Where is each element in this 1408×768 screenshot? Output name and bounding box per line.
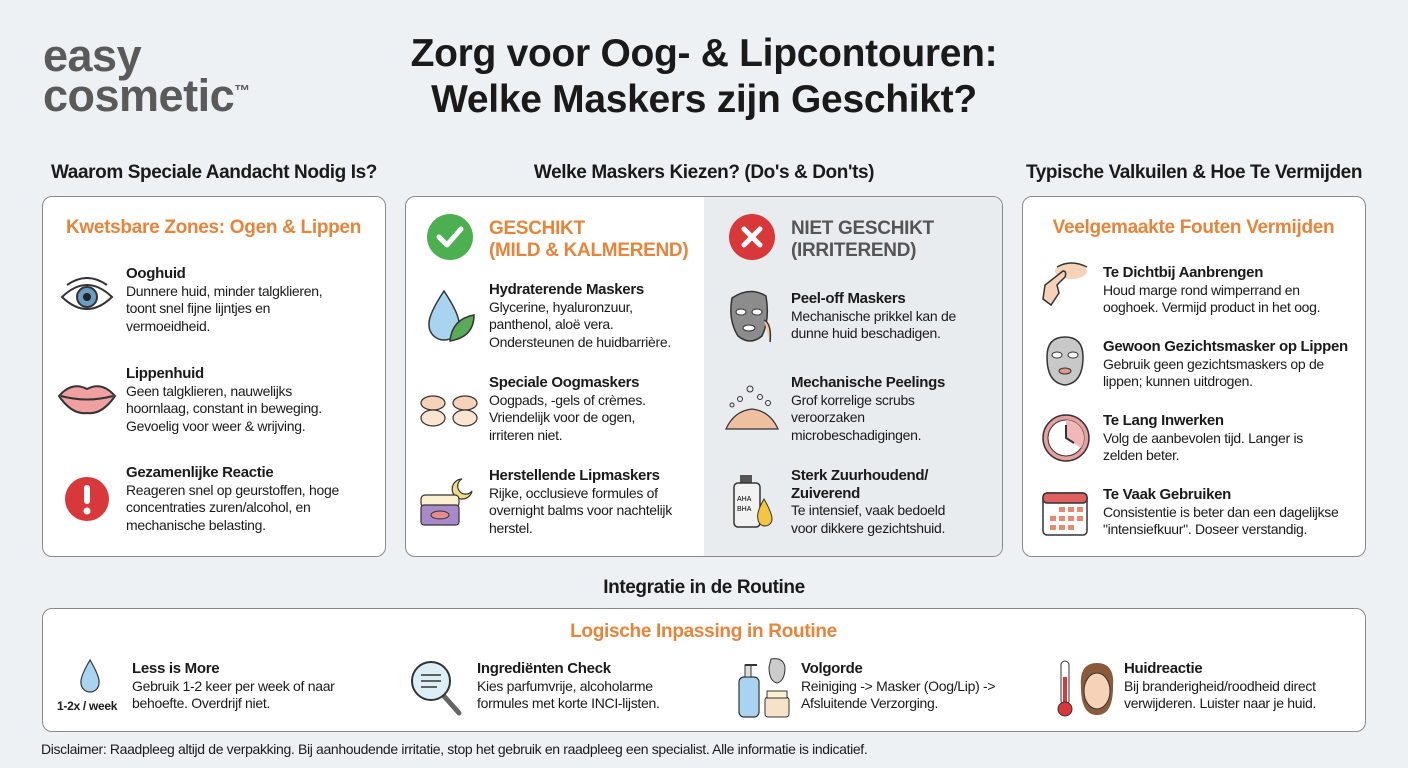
panel: routine bbox=[42, 608, 1366, 732]
heading: niet geschikt: (IRRITEREND) bbox=[791, 240, 916, 261]
icon: acid bottle: BHA bbox=[737, 506, 752, 513]
icon: eye bbox=[60, 277, 114, 310]
panel: do's and don'ts bbox=[405, 196, 1003, 557]
item: ingredienten: Kies parfumvrije, alcoholarme bbox=[477, 678, 653, 694]
item: te dichtbij: Te Dichtbij Aanbrengen bbox=[1103, 264, 1263, 281]
item: gezamenlijke reactie: Gezamenlijke Reactie bbox=[126, 464, 273, 481]
item: te vaak: Te Vaak Gebruiken bbox=[1103, 486, 1231, 503]
item: volgorde bbox=[801, 660, 995, 711]
item: lippenhuid bbox=[126, 365, 322, 434]
item: ooghuid: vermoeidheid. bbox=[126, 318, 210, 334]
icon: scrub bbox=[725, 386, 779, 430]
heading: geschikt bbox=[489, 218, 688, 261]
panel: vulnerable zones bbox=[42, 196, 386, 557]
item: lippenhuid: Geen talgklieren, nauwelijks bbox=[126, 382, 292, 398]
icon: lip jar bbox=[420, 478, 473, 526]
item: te lang bbox=[1103, 412, 1303, 463]
item: ingredienten: formules met korte INCI-lijsten. bbox=[477, 695, 660, 711]
item: gezamenlijke reactie bbox=[126, 464, 339, 533]
item: gezamenlijke reactie: Reageren snel op geurstoffen, hoge bbox=[126, 482, 339, 498]
item: volgorde: Reiniging -> Masker (Oog/Lip) -> bbox=[801, 678, 995, 694]
icon: clock bbox=[1042, 414, 1090, 462]
item: lippenhuid: hoornlaag, constant in beweging. bbox=[126, 400, 322, 416]
item: ooghuid: Dunnere huid, minder talgklieren, bbox=[126, 282, 322, 298]
heading: right: Typische Valkuilen & Hoe Te Vermijden bbox=[1026, 162, 1362, 183]
item: gezichtsmasker op lippen: lippen; kunnen uitdrogen. bbox=[1103, 373, 1253, 389]
title bbox=[411, 32, 997, 121]
item: less is more: Gebruik 1-2 keer per week of naar bbox=[132, 678, 335, 694]
heading: geschikt: GESCHIKT bbox=[489, 218, 585, 239]
item: oogmaskers bbox=[489, 374, 646, 442]
heading: routine: Integratie in de Routine bbox=[603, 577, 805, 598]
item: ooghuid bbox=[126, 265, 322, 334]
item: lipmaskers: Rijke, occlusieve formules of bbox=[489, 484, 658, 500]
item: volgorde: Volgorde bbox=[801, 660, 862, 677]
item: oogmaskers: irriteren niet. bbox=[489, 426, 562, 442]
icon: face mask bbox=[1046, 336, 1084, 386]
right half background bbox=[704, 197, 1004, 558]
icon: drop 1-2x: 1-2x / week bbox=[57, 699, 117, 713]
item: lipmaskers bbox=[489, 467, 672, 536]
title: Zorg voor Oog- & Lipcontouren: bbox=[411, 32, 997, 75]
item: lipmaskers: herstel. bbox=[489, 520, 533, 536]
icon: products bbox=[738, 658, 790, 718]
item: huidreactie: Huidreactie bbox=[1124, 660, 1202, 677]
item: less is more bbox=[132, 660, 335, 711]
heading: middle: Welke Maskers Kiezen? (Do's & Don'ts) bbox=[534, 162, 874, 183]
item: te lang: Te Lang Inwerken bbox=[1103, 412, 1224, 429]
panel heading: Kwetsbare Zones: Ogen & Lippen bbox=[66, 217, 361, 238]
item: zuurhoudend: Te intensief, vaak bedoeld bbox=[791, 502, 945, 518]
heading: niet geschikt bbox=[791, 218, 934, 261]
item: gezamenlijke reactie: concentraties zuren/alcohol, en bbox=[126, 499, 310, 515]
logo: cosmetic™ bbox=[43, 70, 250, 121]
item: te dichtbij bbox=[1103, 264, 1320, 315]
item: peel-off: Peel-off Maskers bbox=[791, 290, 905, 307]
item: te vaak: "intensiefkuur". Doseer verstandig. bbox=[1103, 521, 1307, 537]
icon: peel-off mask bbox=[730, 290, 772, 342]
item: volgorde: Afsluitende Verzorging. bbox=[801, 695, 938, 711]
item: lippenhuid: Lippenhuid bbox=[126, 365, 204, 382]
item: zuurhoudend: Sterk Zuurhoudend/ bbox=[791, 467, 928, 484]
heading: left: Waarom Speciale Aandacht Nodig Is? bbox=[51, 162, 377, 183]
icon: finger at eye bbox=[1042, 262, 1088, 306]
disclaimer: Disclaimer: Raadpleeg altijd de verpakking. Bij aanhoudende irritatie, stop het gebruik en raadpleeg een specialist. Alle informatie is indicatief. bbox=[41, 741, 867, 757]
item: gezichtsmasker op lippen: Gebruik geen gezichtsmaskers op de bbox=[1103, 356, 1324, 372]
item: lippenhuid: Gevoelig voor weer & wrijving. bbox=[126, 418, 305, 434]
item: lipmaskers: overnight balms voor nachtelijk bbox=[489, 502, 672, 518]
item: zuurhoudend: voor dikkere gezichtshuid. bbox=[791, 520, 945, 536]
item: hydraterende: Hydraterende Maskers bbox=[489, 281, 644, 298]
item: te lang: zelden beter. bbox=[1103, 447, 1179, 463]
item: gezamenlijke reactie: mechanische belasting. bbox=[126, 516, 266, 532]
item: zuurhoudend: Zuiverend bbox=[791, 484, 860, 502]
item: oogmaskers: Oogpads, -gels of crèmes. bbox=[489, 392, 646, 408]
title: Welke Maskers zijn Geschikt? bbox=[431, 78, 977, 121]
icon: magnifier bbox=[411, 661, 462, 716]
item: gezichtsmasker op lippen bbox=[1103, 338, 1348, 389]
item: hydraterende: Glycerine, hyaluronzuur, bbox=[489, 298, 633, 314]
logo bbox=[43, 30, 250, 121]
item: ooghuid: Ooghuid bbox=[126, 265, 186, 282]
icon: calendar bbox=[1042, 492, 1088, 536]
item: peelings: microbeschadigingen. bbox=[791, 426, 921, 442]
item: peel-off: dunne huid beschadigen. bbox=[791, 325, 941, 341]
panel heading: Logische Inpassing in Routine bbox=[570, 621, 837, 642]
item: peelings bbox=[791, 374, 945, 443]
item: te dichtbij: ooghoek. Vermijd product in het oog. bbox=[1103, 299, 1320, 315]
item: te lang: Volg de aanbevolen tijd. Langer is bbox=[1103, 430, 1303, 446]
icon: eye pads bbox=[420, 395, 478, 427]
item: hydraterende: Ondersteunen de huidbarrière. bbox=[489, 334, 671, 350]
item: te vaak: Consistentie is beter dan een dagelijkse bbox=[1103, 504, 1338, 520]
heading: geschikt: (MILD & KALMEREND) bbox=[489, 240, 688, 261]
item: peelings: Mechanische Peelings bbox=[791, 374, 945, 391]
icon: acid bottle bbox=[733, 475, 772, 528]
heading: niet geschikt: NIET GESCHIKT bbox=[791, 218, 934, 239]
item: ooghuid: toont snel fijne lijntjes en bbox=[126, 300, 270, 316]
icon: cross bbox=[729, 214, 775, 260]
icon: drop 1-2x bbox=[57, 659, 118, 713]
icon: check bbox=[427, 214, 473, 260]
item: gezichtsmasker op lippen: Gewoon Gezichtsmasker op Lippen bbox=[1103, 338, 1348, 355]
item: ingredienten bbox=[477, 660, 660, 711]
item: less is more: behoefte. Overdrijf niet. bbox=[132, 695, 270, 711]
item: lipmaskers: Herstellende Lipmaskers bbox=[489, 467, 660, 484]
item: peel-off bbox=[791, 290, 956, 341]
panel: pitfalls bbox=[1022, 196, 1366, 557]
item: hydraterende: panthenol, aloë vera. bbox=[489, 316, 613, 332]
item: peelings: Grof korrelige scrubs bbox=[791, 392, 915, 408]
item: te vaak bbox=[1103, 486, 1338, 537]
icon: acid bottle: AHA bbox=[737, 496, 752, 503]
item: zuurhoudend bbox=[791, 467, 945, 536]
logo: easy bbox=[43, 30, 141, 81]
item: huidreactie: verwijderen. Luister naar je huid. bbox=[1124, 695, 1316, 711]
item: huidreactie bbox=[1124, 660, 1316, 711]
icon: lips bbox=[58, 385, 116, 414]
item: ingredienten: Ingrediënten Check bbox=[477, 660, 611, 677]
item: oogmaskers: Speciale Oogmaskers bbox=[489, 374, 639, 391]
item: huidreactie: Bij branderigheid/roodheid direct bbox=[1124, 678, 1316, 694]
item: oogmaskers: Vriendelijk voor de ogen, bbox=[489, 409, 635, 425]
item: peelings: veroorzaken bbox=[791, 409, 865, 425]
item: less is more: Less is More bbox=[132, 660, 219, 677]
item: peel-off: Mechanische prikkel kan de bbox=[791, 308, 956, 324]
icon: drop leaf bbox=[428, 290, 475, 342]
panel heading: Veelgemaakte Fouten Vermijden bbox=[1053, 217, 1334, 238]
icon: thermometer face bbox=[1058, 660, 1114, 716]
icon: warning bbox=[65, 477, 109, 521]
item: te dichtbij: Houd marge rond wimperrand en bbox=[1103, 282, 1300, 298]
item: hydraterende bbox=[489, 281, 671, 350]
